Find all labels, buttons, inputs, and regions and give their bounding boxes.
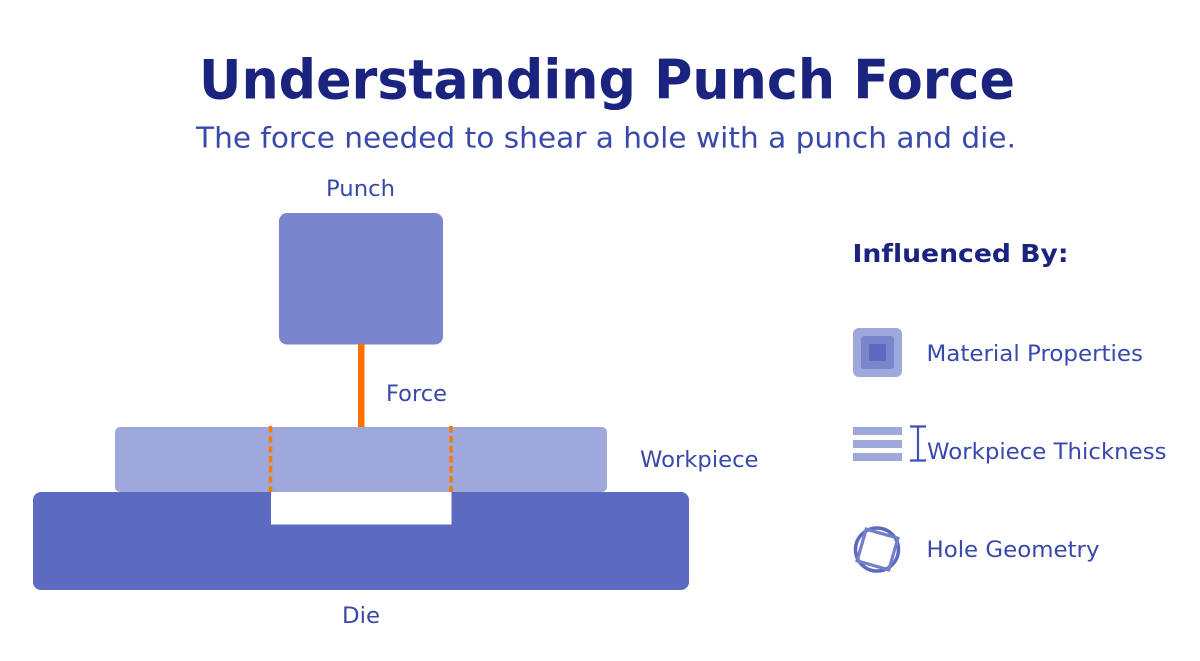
shear line left [269,426,272,492]
label: die: Die [342,604,380,629]
label: workpiece thickness: Workpiece Thickness [927,439,1166,465]
die opening [271,492,452,524]
title: Understanding Punch Force [199,48,1015,112]
die block [33,492,689,590]
subtitle: The force needed to shear a hole with a punch and die. [195,122,1016,154]
force line [358,344,364,427]
shear line right [449,426,453,492]
label: punch: Punch [326,177,395,202]
influences heading: Influenced By: [852,239,1068,268]
influences panel [852,239,1166,571]
workpiece [115,427,607,492]
icon: workpiece thickness [853,426,926,461]
punch and die diagram [33,177,758,629]
label: hole geometry: Hole Geometry [926,537,1100,563]
icon: hole geometry [856,528,898,571]
label: force: Force [386,382,447,407]
label: material properties: Material Properties [926,341,1143,367]
icon: material properties [853,328,902,377]
punch block [279,213,443,344]
label: workpiece: Workpiece [640,448,758,473]
